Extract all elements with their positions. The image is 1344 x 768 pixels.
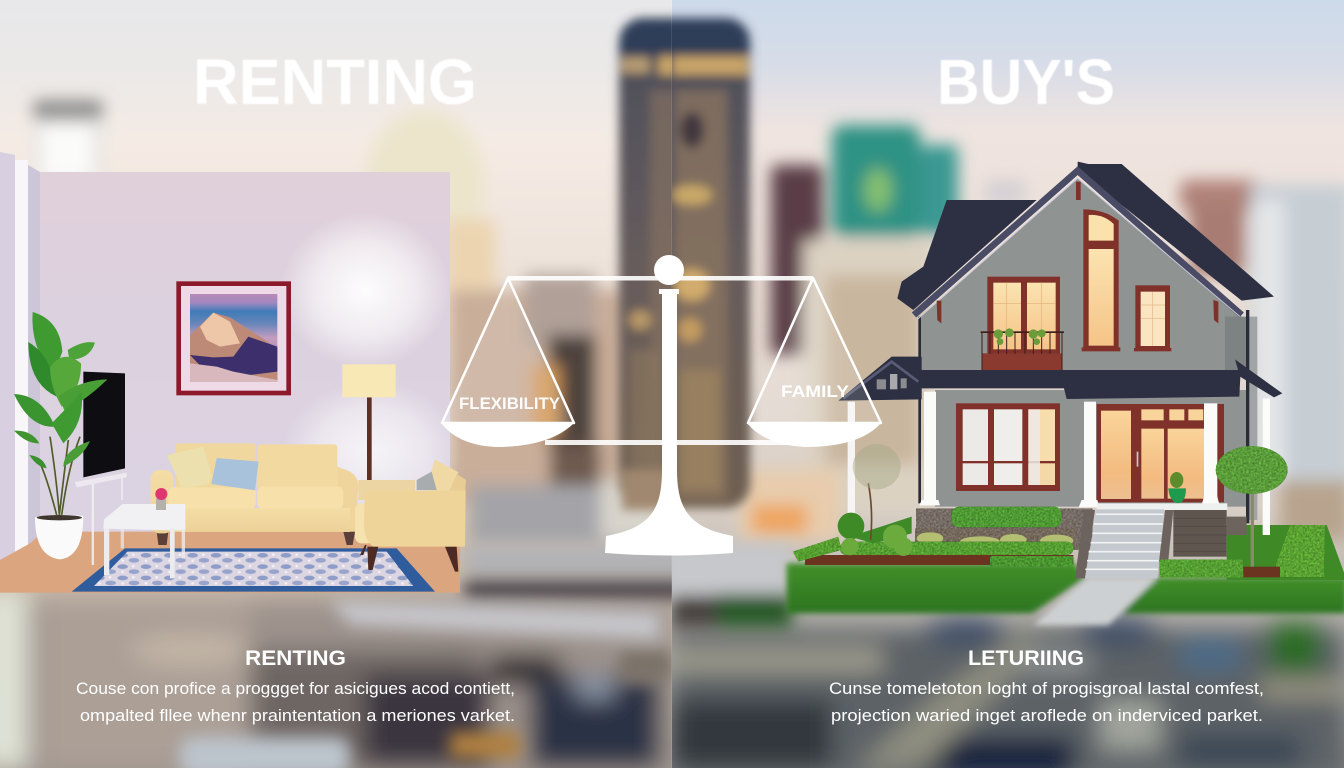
balance scale bbox=[441, 255, 881, 556]
floor bbox=[0, 532, 460, 593]
panel: suburban house bbox=[787, 162, 1344, 625]
lawn and path bbox=[787, 525, 1344, 625]
left porch post bbox=[848, 402, 855, 516]
label: family: FAMILY bbox=[781, 382, 850, 401]
scale post and base bbox=[605, 470, 733, 556]
label: flexibility: FLEXIBILITY bbox=[459, 394, 561, 413]
floor lamp bbox=[342, 364, 396, 481]
text block: leturiing: LETURIING bbox=[968, 647, 1084, 670]
porch columns bbox=[919, 392, 1270, 535]
small upper window bbox=[1134, 285, 1171, 351]
gable fascia bbox=[914, 171, 1242, 323]
left pan bbox=[441, 278, 574, 447]
porch gable trim bbox=[843, 362, 918, 398]
text block: renting bbox=[76, 647, 515, 725]
background: blurred city right half bbox=[672, 0, 1344, 768]
rug bbox=[72, 548, 435, 592]
text block: leturiing: projection waried inget aroflede on inderviced parket. bbox=[831, 706, 1263, 725]
text block: renting: Couse con profice a proggget for asicigues acod contiett, bbox=[76, 679, 515, 698]
walls bbox=[918, 178, 1257, 523]
armchair bbox=[355, 461, 466, 572]
balcony window and railing bbox=[981, 277, 1064, 371]
lower bar bbox=[545, 440, 790, 445]
tv on stand bbox=[75, 372, 127, 565]
text block: leturiing: Cunse tomeletoton loght of progisgroal lastal comfest, bbox=[829, 679, 1264, 698]
title: renting: RENTING bbox=[193, 46, 477, 118]
side table bbox=[358, 480, 415, 500]
text block: leturiing bbox=[829, 647, 1264, 725]
background: blurred city left half bbox=[0, 0, 672, 768]
text block: renting: ompalted fllee whenr praintentation a meriones varket. bbox=[80, 706, 515, 725]
lower left window bbox=[956, 403, 1060, 491]
right pan bbox=[747, 278, 881, 447]
tall arched window bbox=[1082, 209, 1120, 351]
panel: rental living room bbox=[0, 152, 466, 593]
coffee table bbox=[103, 488, 185, 578]
painting bbox=[176, 281, 291, 395]
upper roof bbox=[897, 162, 1274, 310]
right tree bbox=[1216, 446, 1288, 567]
small left tree bbox=[853, 444, 901, 540]
front steps bbox=[1085, 509, 1164, 578]
sofa bbox=[151, 443, 358, 545]
scale beam and finial bbox=[508, 255, 813, 473]
front door and sidelights bbox=[1097, 404, 1224, 503]
plant bbox=[14, 312, 107, 559]
lower roof bbox=[838, 357, 1282, 401]
shrubs and flower bed bbox=[793, 507, 1243, 578]
room walls bbox=[0, 152, 462, 560]
stone foundation and porch bbox=[916, 503, 1247, 578]
title: buy's: BUY'S bbox=[937, 46, 1115, 118]
text block: renting: RENTING bbox=[245, 647, 346, 670]
